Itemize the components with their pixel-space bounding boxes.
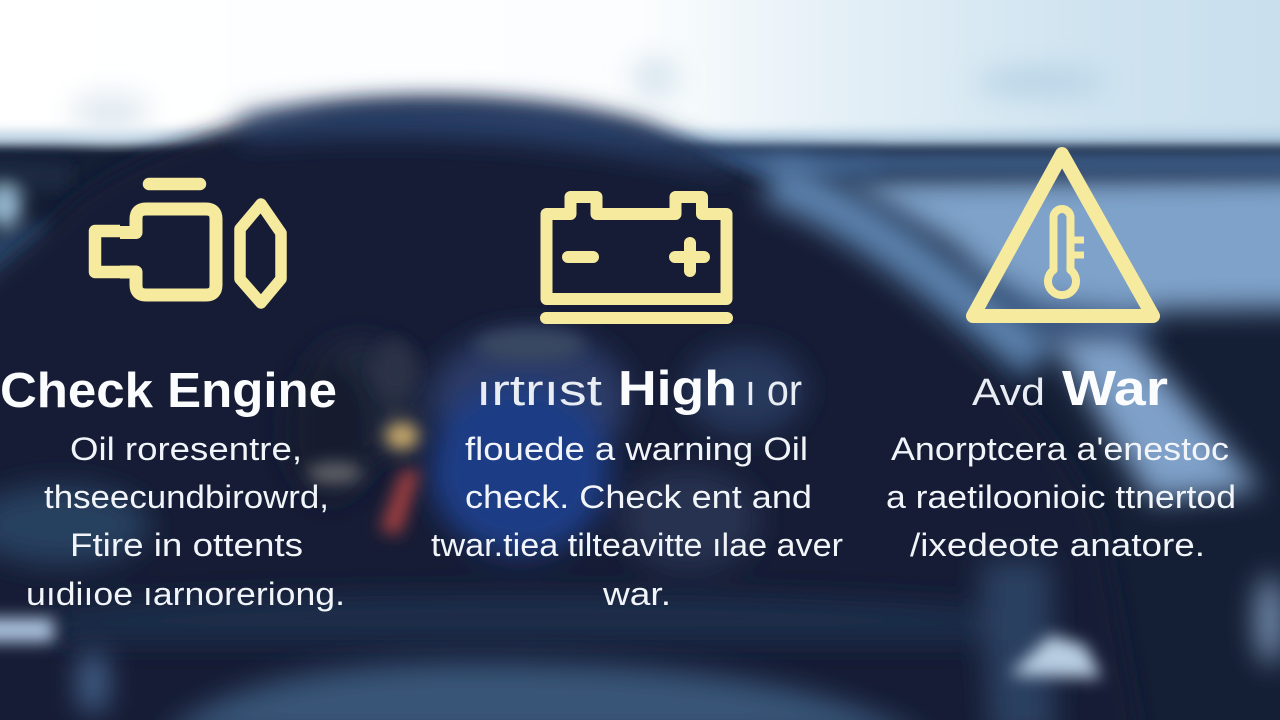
heading: check engine: Check Engine <box>0 364 337 418</box>
icon: check engine <box>95 184 281 303</box>
heading: high: ırtrıst <box>476 366 602 415</box>
heading: war: Avd <box>972 372 1045 414</box>
body text: check engine <box>26 431 345 612</box>
body text: temperature <box>886 431 1236 563</box>
column 3: temperature text <box>886 362 1236 563</box>
body text: temperature: /ixedeote anatore. <box>910 527 1205 563</box>
body text: battery: war. <box>602 576 671 612</box>
body text: temperature: Anorptcera a'enestoc <box>891 431 1229 467</box>
icon: battery <box>546 197 727 318</box>
body text: check engine: Oil roresentre, <box>70 431 302 467</box>
body text: temperature: a raetiloonioic ttnertod <box>886 479 1236 515</box>
heading: war: War <box>1062 362 1168 416</box>
body text: battery: check. Check ent and <box>465 479 812 515</box>
body text: battery <box>431 431 843 612</box>
body text: check engine: Ftire in ottents <box>70 527 303 563</box>
column 2: battery text <box>431 362 843 612</box>
heading: high: ı or <box>745 366 802 415</box>
column 1: check engine text <box>0 364 345 612</box>
body text: battery: flouede a warning Oil <box>465 431 808 467</box>
heading: high <box>476 362 802 416</box>
body text: check engine: thseecundbirowrd, <box>44 479 329 515</box>
heading: high: High <box>618 362 737 416</box>
heading: war <box>972 362 1168 416</box>
icon: temperature warning triangle <box>973 154 1153 316</box>
body text: battery: twar.tiea tilteavitte ılae aver <box>431 527 843 563</box>
body text: check engine: uıdiıoe ıarnoreriong. <box>26 576 345 612</box>
